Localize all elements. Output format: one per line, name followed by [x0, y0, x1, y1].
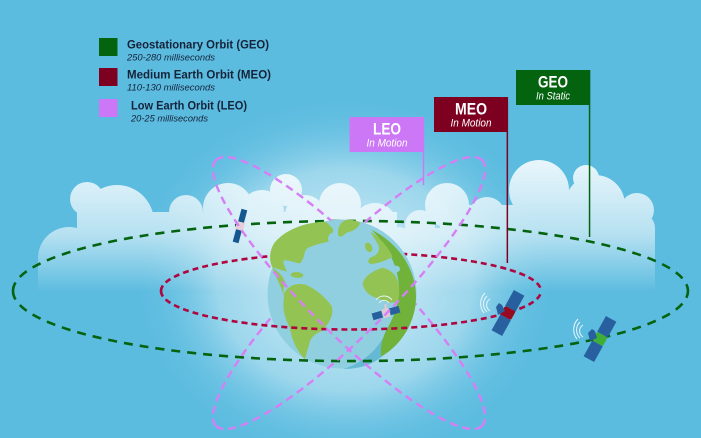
legend item: GEO: [99, 38, 269, 64]
legend item: GEO: Geostationary Orbit (GEO): [127, 40, 269, 52]
GEO orbit, back half: [13, 221, 688, 291]
legend item: MEO: Medium Earth Orbit (MEO): [127, 70, 271, 82]
continents: [270, 220, 399, 359]
GEO orbit, front half: [13, 291, 688, 361]
island: [290, 272, 304, 278]
earth glow: [120, 90, 570, 438]
orbit paths behind the earth: [13, 131, 688, 426]
LEO orbit A, back half: [216, 131, 511, 426]
signal waves: [376, 296, 392, 303]
satellite: LEO upper left: [232, 209, 248, 243]
greenland: [338, 220, 360, 237]
red sea water: [392, 266, 400, 272]
legend item: MEO: 110-130 milliseconds: [127, 82, 215, 94]
satellite: MEO: [481, 290, 524, 336]
europe: [368, 232, 393, 264]
flag: GEO: [516, 70, 590, 237]
flag: GEO: GEO: [538, 72, 568, 92]
flag: MEO: MEO: [455, 100, 487, 118]
LEO orbit B, back half: [187, 131, 482, 426]
dark green crescent: [372, 230, 416, 357]
flag: LEO: LEO: [373, 120, 401, 138]
lower teal crescent: [343, 338, 383, 369]
flag: LEO: [350, 117, 424, 185]
signal waves: [574, 319, 583, 339]
legend item: GEO: 250-280 milliseconds: [126, 52, 215, 64]
legend item: LEO: Low Earth Orbit (LEO): [131, 100, 247, 112]
satellite: LEO on earth: [371, 296, 401, 321]
earth: [268, 220, 416, 369]
legend: [99, 38, 271, 124]
MEO orbit, front half: [161, 291, 541, 330]
legend item: MEO: [99, 68, 271, 94]
legend item: LEO: [99, 99, 247, 124]
flag: LEO: In Motion: [366, 138, 408, 150]
orbit paths in front of the earth: [13, 160, 688, 438]
flag: GEO: In Static: [536, 90, 570, 102]
central and south america: [273, 268, 332, 359]
satellite: GEO: [574, 316, 616, 362]
small island: [364, 241, 374, 253]
north america: [270, 222, 333, 272]
legend item: LEO: 20-25 milliseconds: [130, 114, 208, 124]
clouds: [38, 160, 655, 286]
flag: MEO: [434, 97, 508, 263]
LEO orbit B, front half: [216, 160, 511, 438]
LEO orbit A, front half: [187, 160, 482, 438]
flag: MEO: In Motion: [450, 118, 492, 130]
signal waves: [481, 293, 490, 313]
africa: [363, 268, 399, 303]
MEO orbit, back half: [161, 252, 541, 291]
